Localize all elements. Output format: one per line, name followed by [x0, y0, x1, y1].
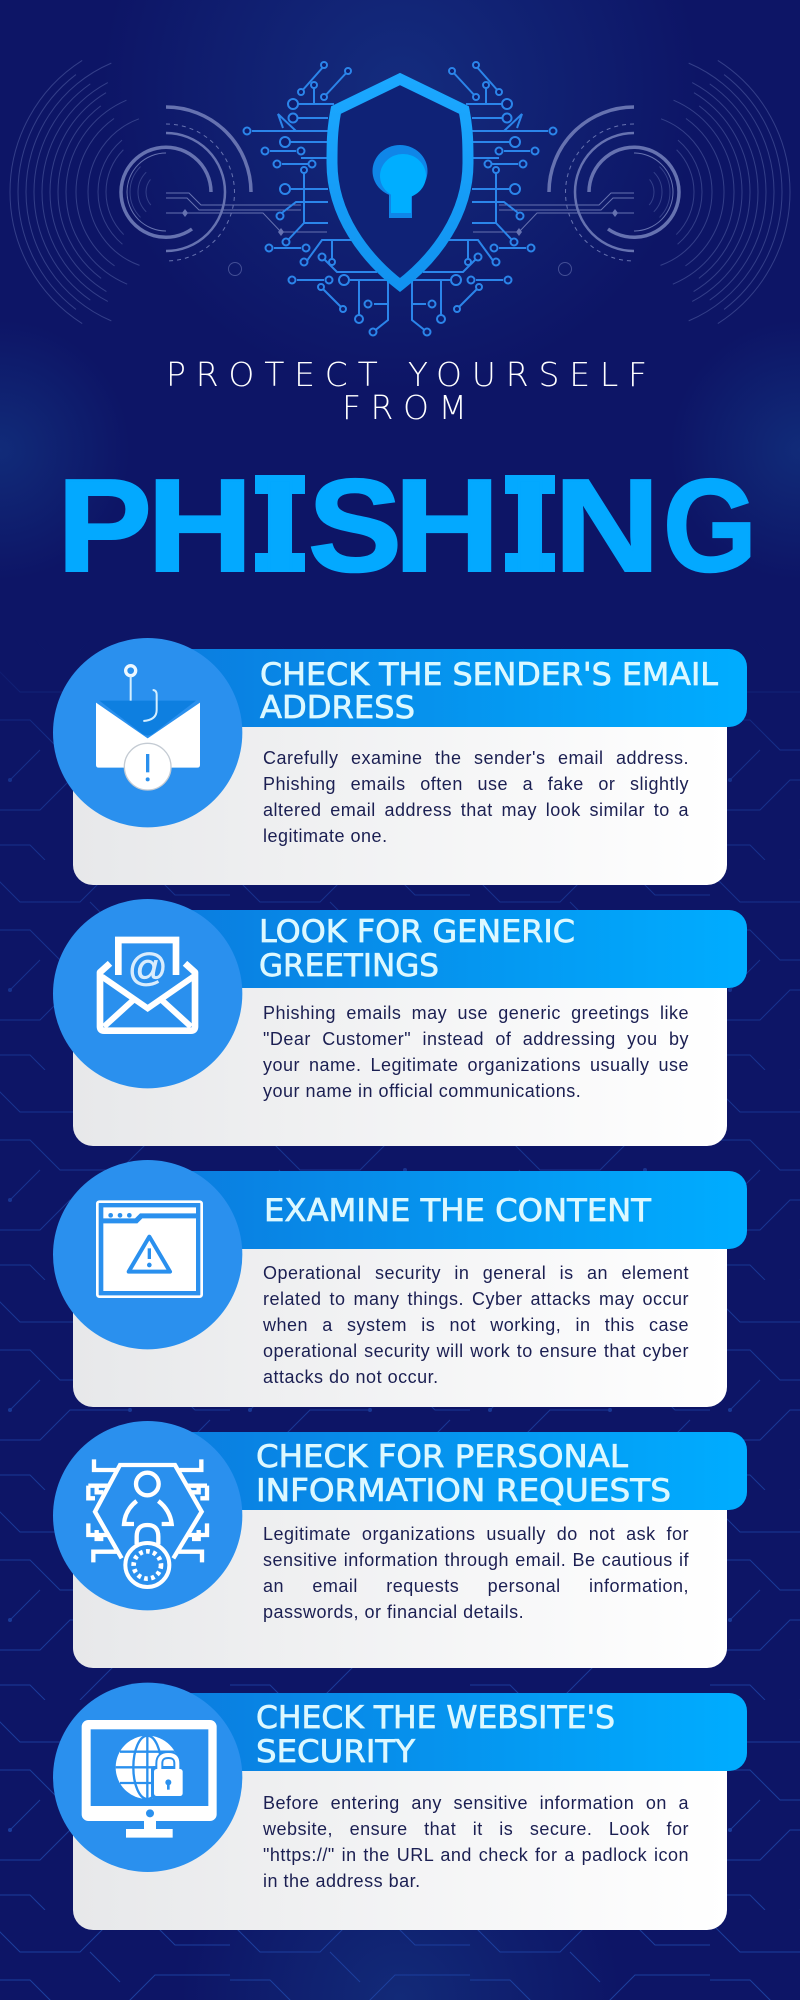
body text: website, ensure that it is secure. Look for [263, 1819, 689, 1839]
body text: your name. Legitimate organizations usually use [263, 1055, 689, 1075]
heading: CHECK THE SENDER'S EMAIL [260, 657, 719, 693]
heading: INFORMATION REQUESTS [256, 1473, 671, 1509]
header bar [190, 649, 747, 727]
icon: shield [332, 79, 468, 285]
body text: "https://" in the URL and check for a padlock icon [263, 1845, 689, 1865]
icon: open envelope with at sign: @ [128, 946, 168, 990]
body text [263, 1263, 689, 1387]
panel: check the sender's email address [53, 638, 747, 885]
body text: legitimate one. [263, 826, 388, 846]
body text: "Dear Customer" instead of addressing you by [263, 1029, 689, 1049]
body text: Before entering any sensitive information on a [263, 1793, 689, 1813]
card background [73, 1235, 727, 1407]
heading [256, 1439, 671, 1509]
panel: look for generic greetings [53, 899, 747, 1146]
header bar [190, 1432, 747, 1510]
icon: keyhole [372, 145, 428, 218]
body text: in the address bar. [263, 1871, 421, 1891]
heading: CHECK FOR PERSONAL [256, 1439, 629, 1475]
subtitle: protect yourself from [166, 355, 647, 427]
heading: CHECK THE WEBSITE'S [256, 1700, 615, 1736]
body text [263, 1524, 689, 1622]
heading [259, 914, 575, 984]
body text: related to many things. Cyber attacks may occur [263, 1289, 689, 1309]
heading [260, 657, 719, 726]
panel: check for personal information requests [53, 1421, 747, 1668]
heading: GREETINGS [259, 948, 439, 984]
left circuit and radar arcs [10, 36, 388, 348]
heading: EXAMINE THE CONTENT [264, 1193, 652, 1229]
headline: phishing [57, 452, 757, 599]
body text [263, 1793, 689, 1891]
body text [263, 748, 689, 846]
panel: check the website's security [53, 1682, 747, 1930]
heading: ADDRESS [260, 690, 415, 726]
subtitle: protect yourself from: PROTECT YOURSELF [166, 355, 647, 394]
body text: altered email address that may look similar to a [263, 800, 689, 820]
body text: operational security will work to ensure that cyber [263, 1341, 689, 1361]
heading: LOOK FOR GENERIC [259, 914, 575, 950]
icon: browser window warning [53, 1160, 242, 1350]
icon: person in hexagon with lock [53, 1421, 242, 1610]
heading: SECURITY [256, 1734, 415, 1770]
body text: Phishing emails often use a fake or slightly [263, 774, 689, 794]
body text: attacks do not occur. [263, 1367, 439, 1387]
body text [263, 1003, 689, 1101]
heading [256, 1700, 615, 1770]
title [57, 355, 757, 590]
header bar [190, 1171, 747, 1249]
hero illustration: shield with circuits [10, 60, 790, 336]
card background [73, 1495, 727, 1668]
subtitle: protect yourself from: FROM [342, 388, 467, 427]
header bar [190, 910, 747, 988]
body text: Phishing emails may use generic greetings like [263, 1003, 689, 1023]
icon: phishing envelope [53, 638, 242, 828]
card background [73, 1765, 727, 1930]
icon: open envelope with at sign [53, 899, 242, 1088]
body text: your name in official communications. [263, 1081, 581, 1101]
icon: monitor with globe and padlock [53, 1682, 242, 1872]
card background [73, 975, 727, 1146]
body text: Legitimate organizations usually do not ask for [263, 1524, 689, 1544]
right circuit and radar arcs [412, 36, 790, 348]
body text: an email requests personal information, [263, 1576, 689, 1596]
body text: when a system is not working, in this case [263, 1315, 689, 1335]
body text: Operational security in general is an element [263, 1263, 689, 1283]
body text: passwords, or financial details. [263, 1602, 524, 1622]
body text: Carefully examine the sender's email address. [263, 748, 689, 768]
header bar [190, 1693, 747, 1771]
panel: examine the content [53, 1160, 747, 1407]
card background [73, 710, 727, 885]
body text: sensitive information through email. Be cautious if [263, 1550, 689, 1570]
